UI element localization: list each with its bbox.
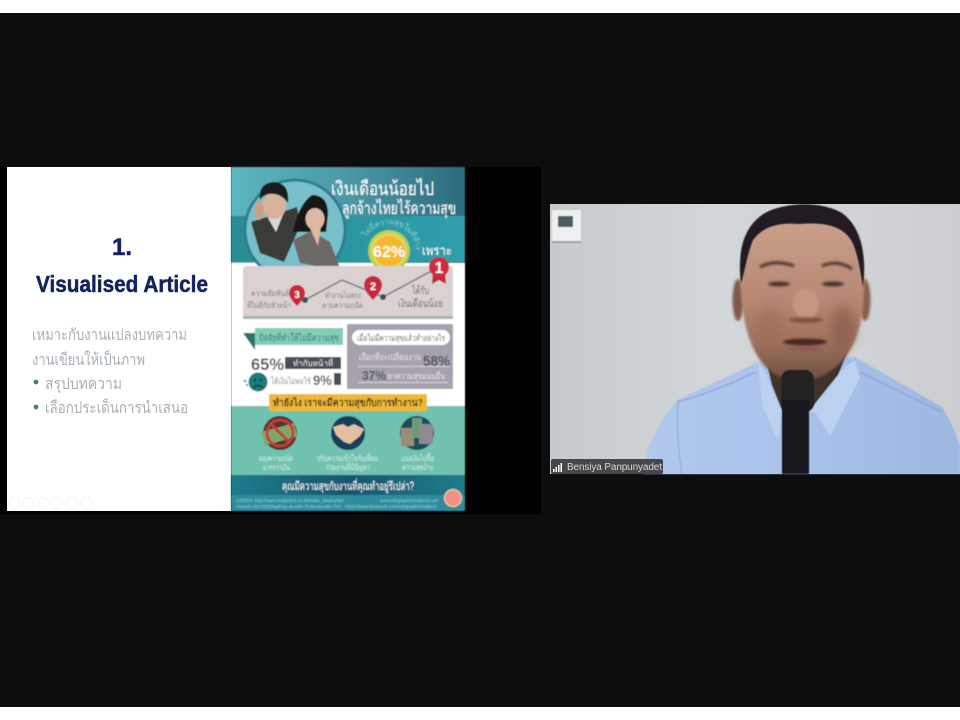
participant name: Bensiya Panpunyadet — [567, 462, 662, 473]
reason 2 text — [322, 291, 363, 310]
reaction heading: เมื่อไม่มีความสุขแล้วทำอย่างไร — [357, 332, 445, 344]
tip 2 text: ปรับความเข้าใจกับเพื่อน — [317, 452, 378, 463]
37 percent statistic: 37% — [362, 368, 386, 383]
because label: เพราะ — [422, 243, 452, 258]
infographic header — [230, 166, 466, 267]
credits footer: newsid=36275539&gblog=&code=TH&subcode=700 — [236, 504, 341, 509]
65 percent statistic — [251, 355, 341, 374]
tip 2 text: ร่วมงานที่มีปัญหา — [326, 461, 370, 472]
slide heading number: 1. — [112, 234, 132, 261]
facial features — [756, 263, 855, 352]
top white strip — [0, 0, 960, 13]
icon: sad face — [244, 372, 268, 392]
panel: unhappiness factors — [243, 328, 343, 392]
slide control icons — [8, 498, 92, 508]
credits footer: CREDIT: http://www.readyclick.co.th/index_detail.php? — [236, 498, 345, 503]
slide body text: เหมาะกับงานแปลงบทความ — [32, 327, 187, 344]
credits footer: https://www.facebook.com/infographicthailand — [345, 504, 437, 509]
microphone — [781, 370, 814, 474]
58 percent statistic: 58% — [423, 353, 450, 370]
speaker — [643, 204, 960, 474]
tip 1 text: มองความถนัด — [259, 454, 293, 463]
slide body text: สรุปบทความ — [45, 376, 122, 394]
panel: infographic — [230, 166, 466, 512]
reason 3 text: ที่ไม่ดีกับหัวหน้า — [247, 299, 291, 310]
ribbon: rank 1 — [429, 257, 449, 284]
slide heading: Visualised Article — [36, 271, 208, 297]
65 percent statistic: 65% — [251, 355, 284, 374]
panel: slide text — [7, 167, 231, 511]
pin: rank 2 — [364, 276, 382, 300]
rising line chart — [302, 268, 437, 303]
credits footer — [231, 490, 465, 511]
panel: what people do when unhappy — [347, 324, 453, 389]
illustration: stressed couple — [245, 180, 345, 280]
bottom white strip — [0, 707, 960, 720]
infographic header: ลูกจ้างไทยไร้ความสุข — [342, 198, 456, 219]
panel: top three reasons — [243, 257, 453, 319]
collar and neck — [677, 335, 942, 474]
tip 2 text — [317, 452, 378, 472]
9 percent statistic: 9% — [313, 372, 333, 388]
tip 3 text: ความสุขบ้าง — [402, 463, 433, 472]
reason 3 text: ความสัมพันธ์ — [251, 288, 289, 298]
slide body text: เลือกประเด็นการนำเสนอ — [45, 397, 188, 417]
reason 2 text: ตามความถนัด — [322, 301, 363, 310]
wall thermostat — [552, 210, 581, 243]
yellow question heading: ทำยังไง เราจะมีความสุขกับการทำงาน? — [273, 396, 423, 409]
37 percent statistic: หาความสุขแบบอื่น — [387, 370, 445, 382]
9 percent statistic: ได้เงินไม่พอใช้ — [270, 376, 311, 386]
icon: shopping bags — [400, 416, 434, 450]
slide body text: งานเขียนให้เป็นภาพ — [32, 349, 145, 369]
credits footer: www.infographicthailand.com — [380, 498, 439, 503]
tip 3 text: แบ่งเงินไปซื้อ — [401, 452, 434, 463]
icon: handshake — [331, 416, 365, 450]
panel: speaker video — [550, 204, 960, 474]
hair — [740, 204, 864, 287]
pin: rank 3: 3 — [294, 290, 300, 301]
tip 3 text — [401, 452, 434, 472]
panel: how to be happy — [231, 394, 465, 476]
9 percent statistic — [270, 372, 341, 388]
infographic title: เงินเดือนน้อยไป — [331, 178, 434, 200]
shirt — [643, 357, 960, 474]
58 percent statistic: เลือกที่จะเปลี่ยนงาน — [359, 351, 421, 362]
icon: signal bars — [553, 463, 562, 472]
slide body text — [32, 327, 188, 417]
reason 3 text — [247, 288, 291, 310]
icon: pink logo — [444, 490, 462, 506]
icon: no money — [261, 416, 298, 450]
37 percent statistic — [358, 368, 448, 383]
58 percent statistic — [358, 351, 450, 370]
black slide surround — [0, 167, 541, 514]
face — [740, 220, 864, 382]
ribbon: rank 1: 1 — [435, 260, 444, 277]
factors heading: ปัจจัยที่ทำให้ไม่มีความสุข — [259, 331, 339, 344]
wall background — [550, 204, 960, 474]
participant name tag — [551, 459, 663, 474]
reason 1 text — [398, 284, 443, 310]
yellow question heading — [269, 394, 427, 411]
62 percent badge — [360, 219, 420, 267]
tip 1 text: มากกว่าเงิน — [263, 463, 290, 472]
pin: rank 3 — [289, 285, 305, 306]
pin: rank 2: 2 — [370, 281, 376, 293]
tip 1 text — [259, 454, 293, 472]
62 percent badge: 62% — [373, 244, 405, 261]
closing question band: คุณมีความสุขกับงานที่คุณทำอยู่รึเปล่า? — [282, 478, 414, 493]
reason 2 text: ทำงานไม่ตรง — [325, 291, 361, 300]
65 percent statistic: ทำกับหน้าที่ — [293, 357, 333, 368]
closing question band — [231, 475, 465, 495]
ears — [732, 279, 870, 321]
reason 1 text: เงินเดือนน้อย — [398, 297, 443, 310]
reason 1 text: ได้รับ — [411, 284, 429, 297]
